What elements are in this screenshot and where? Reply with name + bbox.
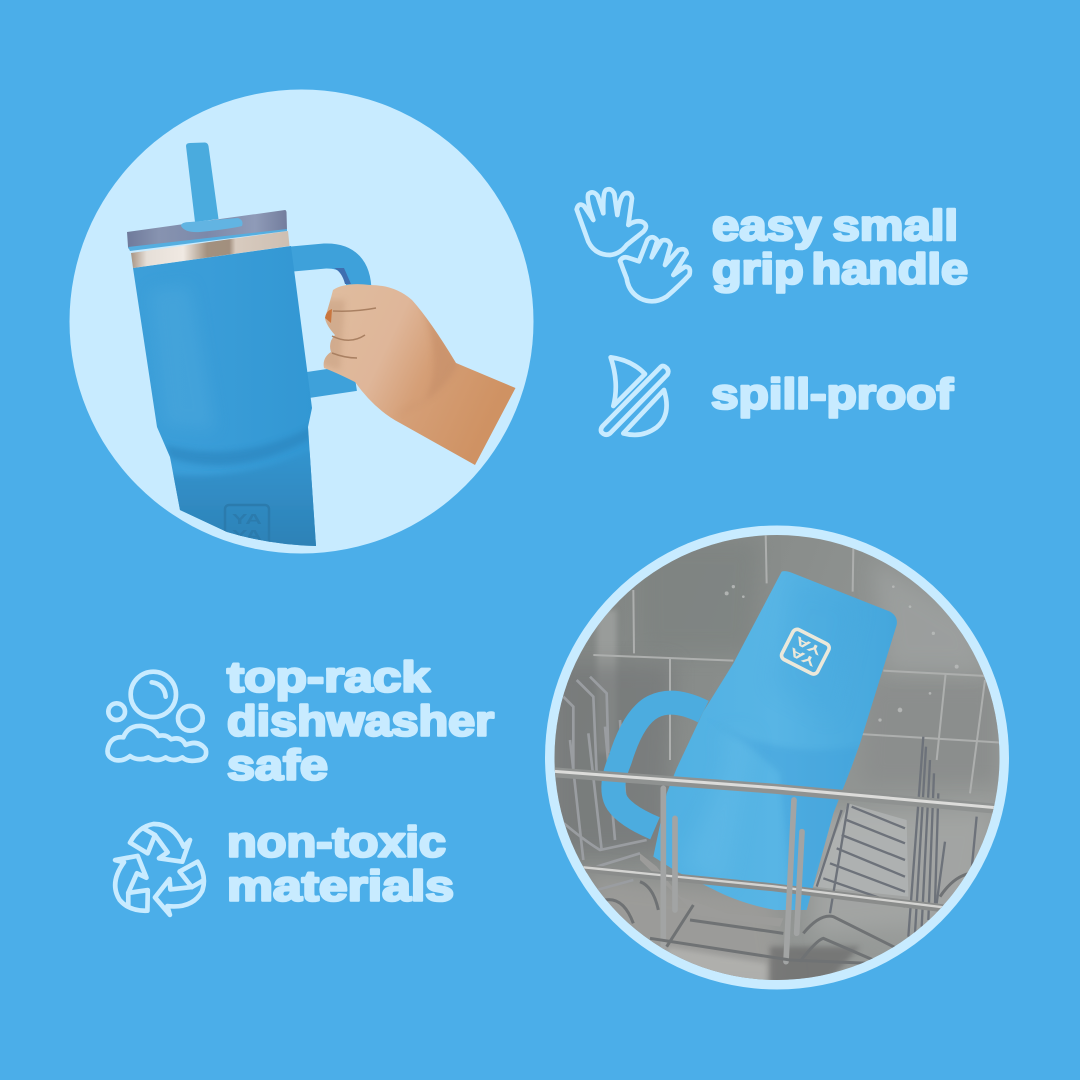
dishwasher photo illustration (545, 526, 1009, 990)
droplets (725, 585, 959, 722)
logo on tumbler (780, 628, 831, 676)
text: non-toxic: non-toxic (227, 818, 446, 866)
feature: easy small grip handle (577, 189, 968, 301)
feature: top-rack dishwasher safe (107, 654, 494, 790)
logo: YA (232, 511, 262, 528)
right dish rack (813, 803, 908, 897)
tumbler body (133, 246, 316, 546)
icon: two hands (577, 189, 690, 301)
logo on tumbler: YA (792, 633, 824, 658)
panel: tumbler held by child's hand (70, 90, 534, 560)
front rack rails (553, 772, 995, 809)
text: safe: safe (227, 742, 328, 790)
logo: YA (232, 527, 262, 544)
left rack tines (560, 677, 647, 890)
handle (292, 256, 359, 385)
icon: bubbles and foam (107, 672, 206, 761)
logo (224, 504, 270, 542)
straw (186, 142, 218, 222)
front rack tines (663, 788, 802, 962)
tumbler photo illustration (127, 142, 516, 560)
child's hand (324, 284, 516, 465)
text: dishwasher: dishwasher (227, 698, 494, 746)
text: grip handle: grip handle (712, 246, 968, 294)
metal base (640, 853, 783, 927)
text: spill-proof: spill-proof (711, 370, 954, 418)
feature: non-toxic materials (101, 818, 454, 923)
feature: spill-proof (601, 357, 954, 435)
logo on tumbler: YA (786, 644, 818, 670)
text: materials: materials (227, 862, 454, 910)
panel: tumbler in dishwasher rack (545, 526, 1009, 990)
text: top-rack: top-rack (227, 654, 430, 702)
icon: recycle (101, 824, 214, 923)
lid (127, 210, 287, 249)
light circle backdrop (70, 90, 534, 554)
steel band (131, 231, 290, 268)
light circle ring (545, 526, 1009, 990)
icon: crossed-out drop (601, 357, 668, 435)
tile joints (593, 533, 1002, 793)
text: easy small: easy small (712, 202, 958, 250)
photo tone patches (553, 540, 1000, 987)
tumbler handle (613, 703, 703, 828)
tumbler body (653, 571, 897, 910)
lower rack wires (605, 873, 970, 963)
